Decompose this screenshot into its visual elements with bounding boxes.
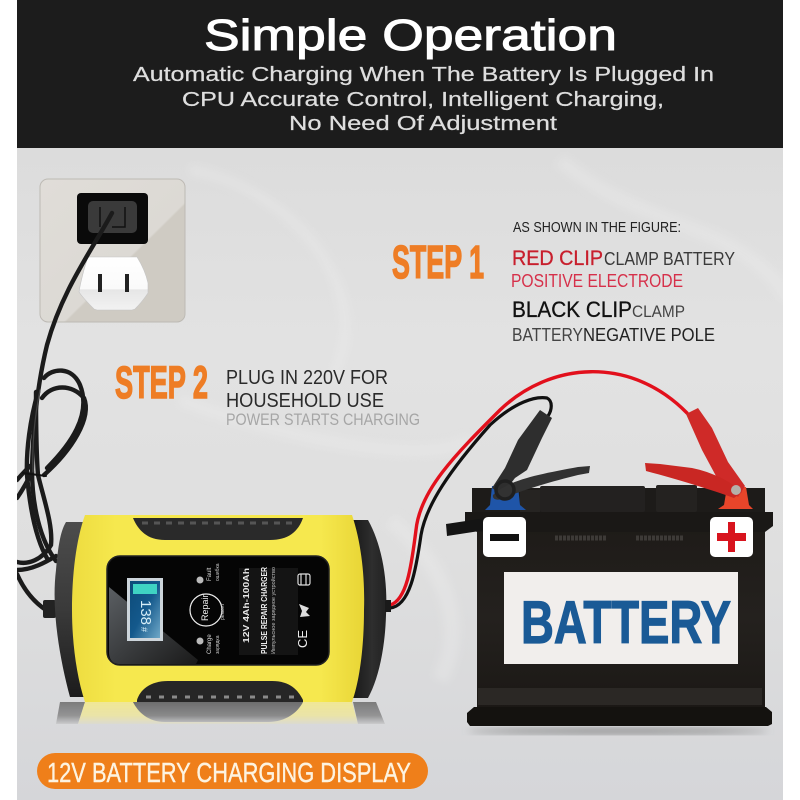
- power line: POWER STARTS CHARGING: [226, 410, 420, 429]
- charger output connector: [43, 600, 56, 618]
- subtitle line 1: Automatic Charging When The Battery Is Plugged In: [133, 63, 714, 86]
- battery: [446, 484, 773, 734]
- negative pole: NEGATIVE POLE: [583, 325, 715, 345]
- minus tile: [483, 517, 526, 557]
- battery word: BATTERY: [521, 589, 731, 656]
- step 1 heading: STEP 1: [392, 236, 484, 288]
- battery label: [504, 572, 738, 664]
- red cable: [390, 372, 687, 605]
- plus tile: [710, 517, 753, 557]
- positive terminal: [718, 487, 753, 509]
- black clip label: BLACK CLIP: [512, 297, 632, 322]
- step 2 instructions: [226, 367, 420, 429]
- rating label: 12V 4Ah-100Ah: [241, 568, 251, 643]
- caption pill: [37, 753, 428, 789]
- product name russian: Импульсное зарядное устройство: [270, 567, 277, 654]
- page background panel: [17, 148, 790, 800]
- positive electrode: POSITIVE ELECTRODE: [511, 271, 683, 291]
- black clamp: [492, 410, 590, 500]
- repair button: Repair: [200, 594, 210, 621]
- household line: HOUSEHOLD USE: [226, 390, 384, 412]
- product name: PULSE REPAIR CHARGER: [260, 567, 269, 654]
- title: Simple Operation: [204, 11, 617, 60]
- red clip label: RED CLIP: [512, 247, 603, 270]
- charge indicator: зарядка: [215, 635, 221, 654]
- figure note: AS SHOWN IN THE FIGURE:: [513, 219, 681, 236]
- subtitle line 2: CPU Accurate Control, Intelligent Charging,: [182, 88, 664, 111]
- rating label: [239, 568, 298, 655]
- step 2 heading: STEP 2: [115, 357, 208, 408]
- LCD display: #: [139, 627, 149, 632]
- repair button: ремонт: [220, 602, 226, 620]
- LCD display: 138: [137, 600, 154, 625]
- battery top housing: [472, 485, 765, 514]
- battery body: [477, 525, 765, 710]
- subtitle line 3: No Need Of Adjustment: [289, 112, 557, 135]
- header band: [17, 0, 783, 148]
- icon: CE mark: CE: [295, 630, 310, 648]
- black cable: [390, 398, 551, 608]
- red clamp: [645, 408, 745, 498]
- icon: car: [298, 574, 310, 585]
- fault indicator: [196, 563, 221, 584]
- charge indicator: [196, 634, 221, 654]
- charger cable strain relief: [385, 600, 391, 612]
- step 1 instructions: [511, 219, 735, 345]
- wall outlet: [40, 179, 185, 322]
- reflection of charger: [56, 702, 385, 724]
- control panel: [107, 556, 329, 665]
- white receptacle: [79, 257, 148, 310]
- battery lid: [465, 512, 773, 532]
- icon: motorcycle: [299, 604, 310, 617]
- charger: [55, 515, 386, 702]
- charger left cap: [55, 522, 90, 697]
- top grip: [133, 518, 303, 540]
- charger right cap: [350, 520, 386, 698]
- charge indicator: Charge: [207, 634, 213, 654]
- negative terminal: [485, 484, 526, 510]
- fault indicator: ошибка: [215, 563, 221, 581]
- battery shadow: [468, 728, 768, 734]
- repair button: [190, 594, 226, 626]
- bottom grip: [137, 681, 303, 702]
- fault indicator: Fault: [207, 567, 213, 581]
- battery text: BATTERY: [512, 325, 583, 345]
- caption text: 12V BATTERY CHARGING DISPLAY: [47, 757, 411, 788]
- black clip text: CLAMP: [632, 302, 685, 321]
- red clip text: CLAMP BATTERY: [604, 249, 735, 269]
- side tab: [446, 518, 486, 536]
- plug in black socket: [77, 193, 148, 244]
- LCD display: [127, 578, 163, 641]
- battery foot: [467, 707, 772, 726]
- charger yellow body: [72, 515, 364, 702]
- power cable and coils: [17, 213, 112, 610]
- plug line: PLUG IN 220V FOR: [226, 367, 388, 389]
